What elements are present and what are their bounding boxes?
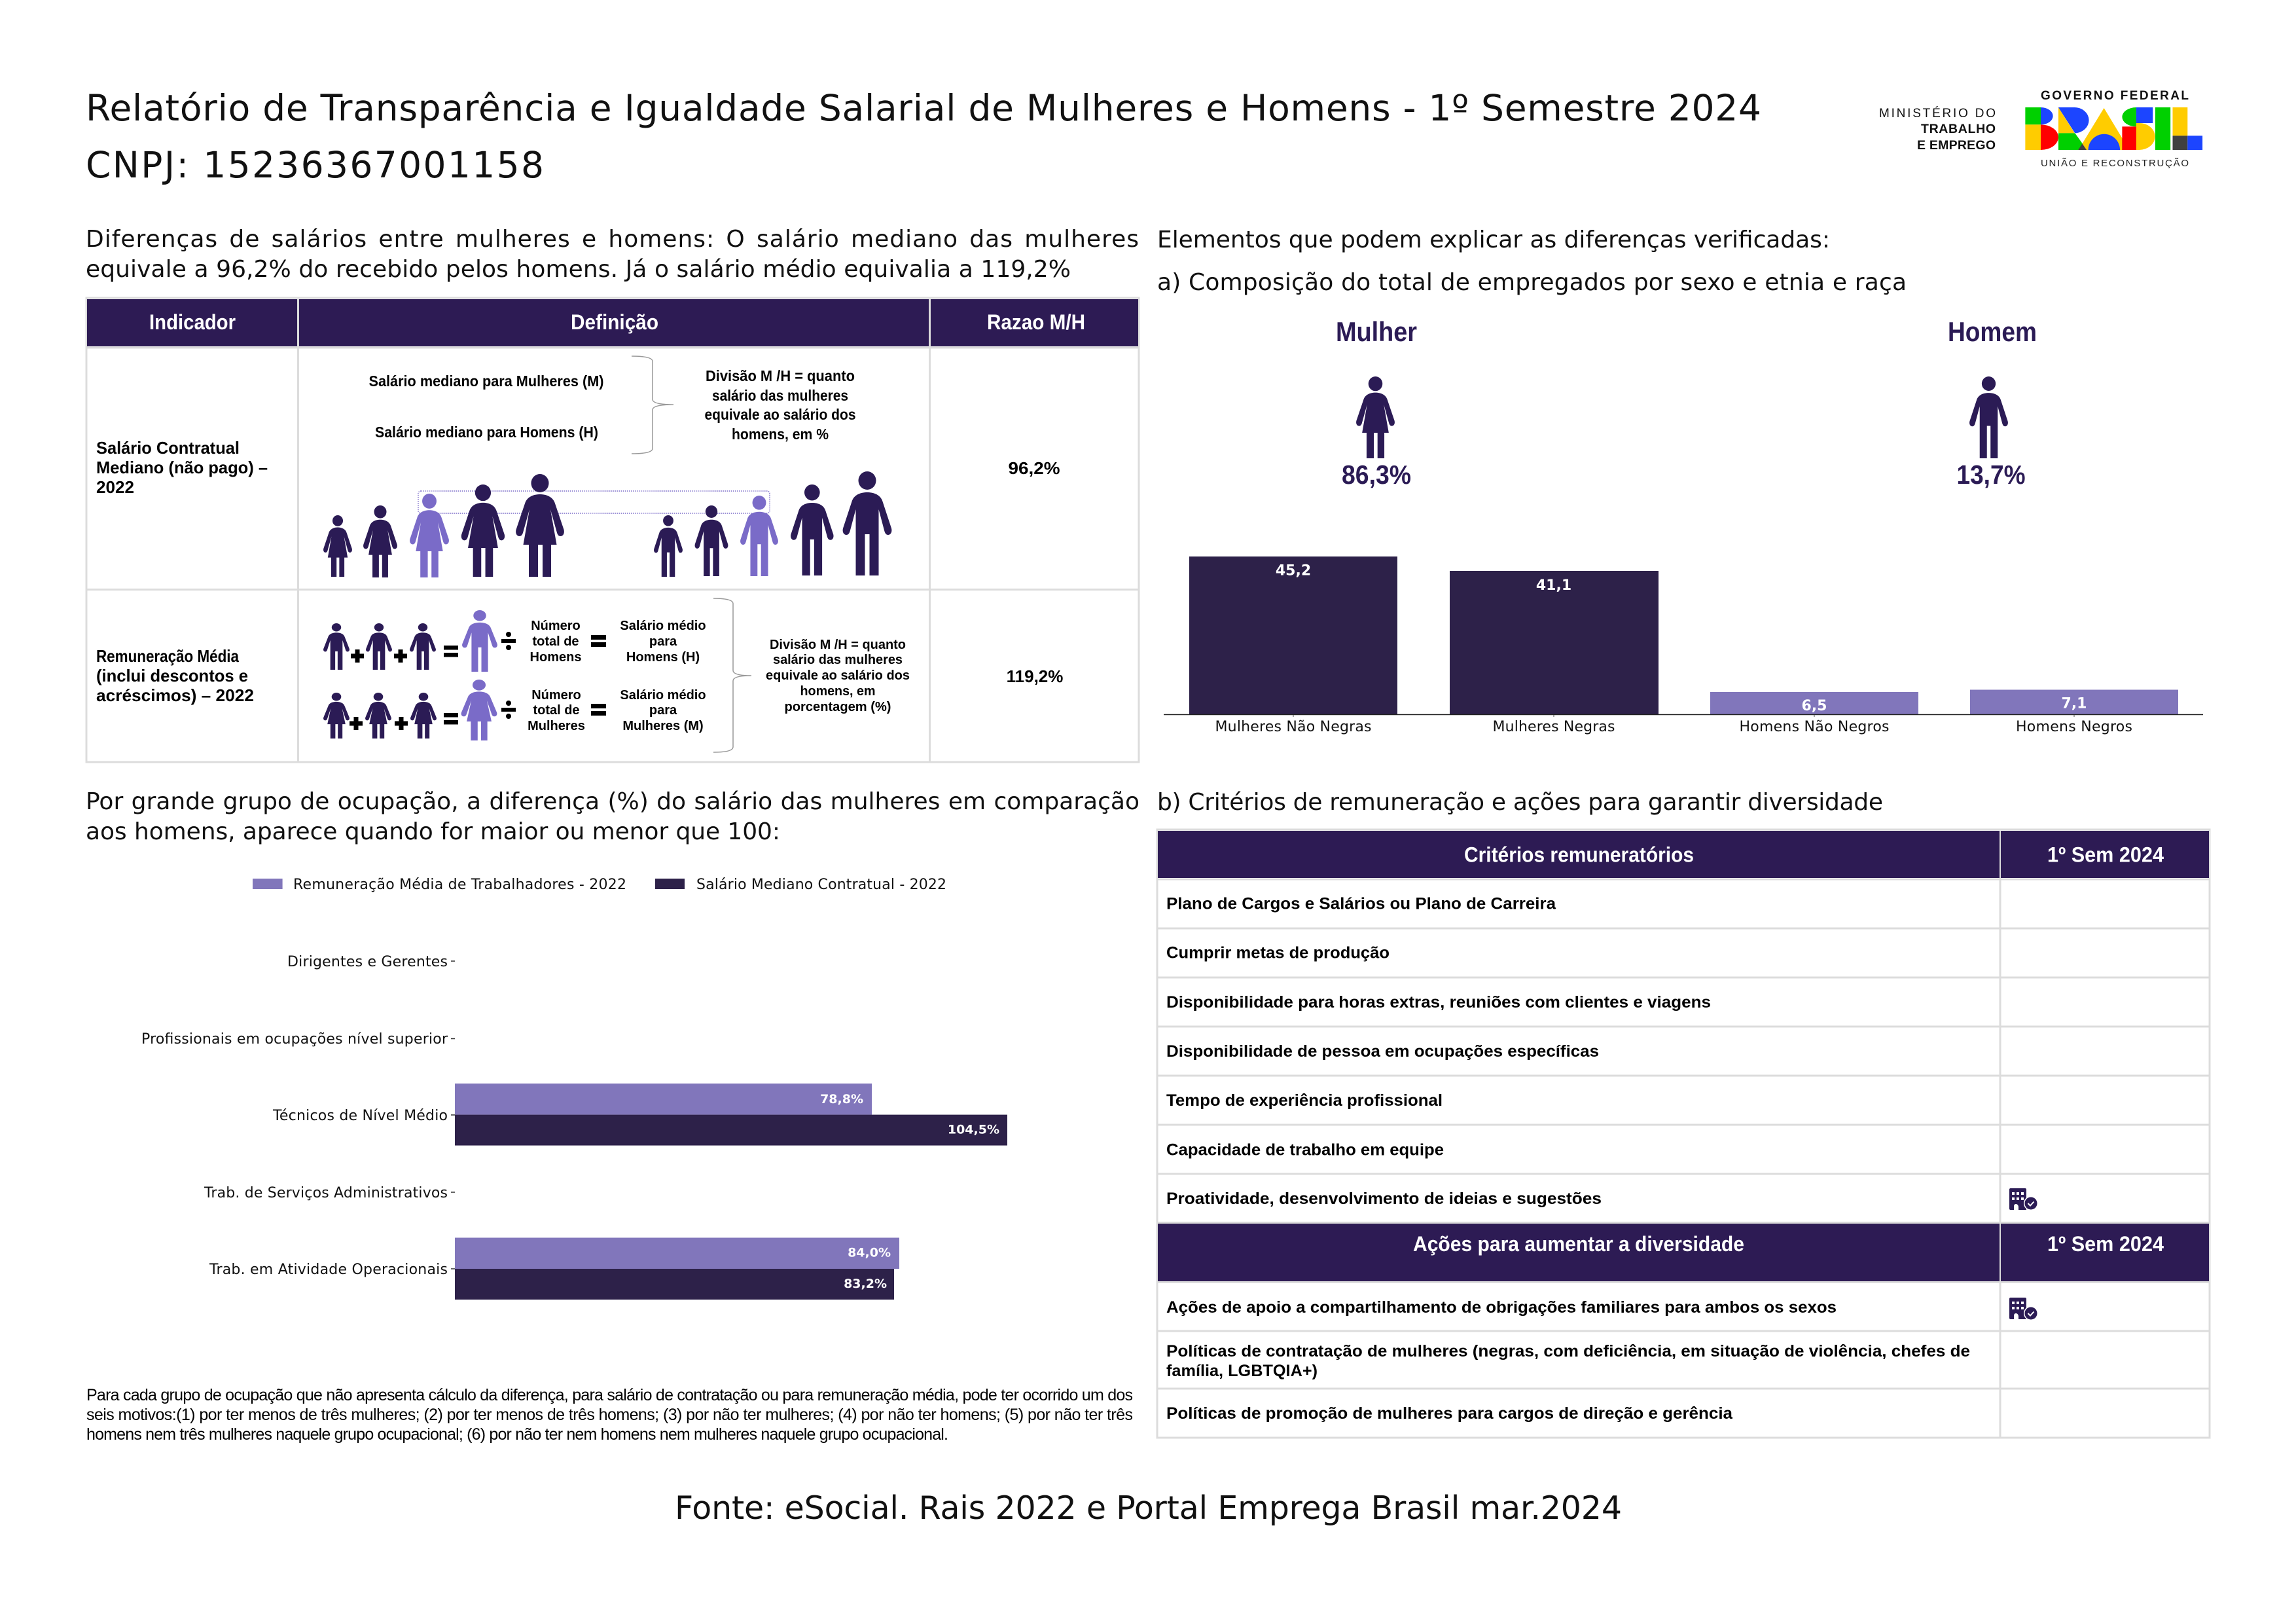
label: homem — [1948, 316, 2037, 490]
bar chart: sex and race: Homens Não Negros — [1740, 719, 1889, 735]
criteria rows — [1166, 894, 1711, 1208]
panel: indicator table — [86, 298, 1139, 762]
definition: divisão mediano: homens, em % — [732, 426, 829, 443]
definition: divisão mediano: equivale ao salário dos — [704, 406, 856, 423]
formula: men average: Homens — [530, 650, 581, 665]
formula: men average: total de — [532, 634, 579, 649]
label: homem: Homem — [1948, 316, 2037, 347]
definition: divisão média — [766, 638, 910, 714]
brace: média — [713, 598, 751, 752]
row label: salário contratual: Mediano (não pago) – — [96, 458, 268, 477]
criteria rows: Disponibilidade para horas extras, reuniões com clientes e viagens — [1166, 993, 1711, 1012]
footnote: Para cada grupo de ocupação que não apresenta cálculo da diferença, para salário de contratação ou para remuneração média, pode ter ocorrido um dos — [86, 1386, 1133, 1404]
formula: women average: total de — [533, 703, 580, 718]
axis labels: Trab. em Atividade Operacionais — [209, 1262, 448, 1278]
formula: women average: Mulheres (M) — [622, 719, 704, 733]
formula: men average — [323, 610, 706, 672]
definition: divisão mediano — [704, 367, 856, 443]
logo: ministério: E EMPREGO — [1917, 138, 1996, 153]
axis labels — [141, 954, 448, 1278]
bar chart: sex and race: Mulheres Não Negras — [1215, 719, 1372, 735]
row label: remuneração média: Remuneração Média — [96, 646, 239, 666]
value: razão mediano: 96,2% — [1008, 458, 1060, 478]
formula: women average: para — [649, 703, 677, 718]
row label: remuneração média — [96, 646, 254, 705]
action rows: Ações de apoio a compartilhamento de obrigações familiares para ambos os sexos — [1166, 1298, 1837, 1317]
label: mulher — [1336, 316, 1417, 490]
action rows: Políticas de promoção de mulheres para cargos de direção e gerência — [1166, 1404, 1733, 1423]
footnote — [86, 1386, 1133, 1444]
bars: operacionais: 83,2% — [844, 1277, 887, 1291]
logo: ministério: MINISTÉRIO DO — [1879, 107, 1996, 120]
footnote: seis motivos:(1) por ter menos de três mulheres; (2) por ter menos de três homens; (3) por não ter mulheres; (4) por não ter homens; (5) por não ter três — [86, 1406, 1133, 1424]
definition: salário mediano labels — [369, 373, 603, 441]
title: CNPJ: 15236367001158 — [86, 144, 544, 186]
bar chart: sex and race: Homens Negros — [2016, 719, 2132, 735]
logo: governo federal brasil: GOVERNO FEDERAL — [2041, 89, 2189, 103]
bar chart: sex and race: 7,1 — [2062, 695, 2087, 712]
footnote: homens nem três mulheres naquele grupo ocupacional; (6) por não ter nem homens nem mulheres naquele grupo ocupacional. — [86, 1425, 948, 1444]
bars: técnicos: 104,5% — [948, 1122, 999, 1137]
chart: occupation bar chart — [141, 877, 1007, 1300]
bars: operacionais — [455, 1237, 899, 1300]
action rows: Políticas de contratação de mulheres (negras, com deficiência, em situação de violência, chefes de — [1166, 1342, 1970, 1360]
header: ações diversidade: Ações para aumentar a diversidade — [1413, 1232, 1744, 1256]
label: mulher: Mulher — [1336, 316, 1417, 347]
bar chart: sex and race: 45,2 — [1276, 563, 1311, 579]
bars: operacionais: 84,0% — [848, 1245, 891, 1260]
formula: women average: Número — [531, 688, 581, 702]
title: Relatório de Transparência e Igualdade Salarial de Mulheres e Homens - 1º Semestre 2024 — [86, 87, 1761, 129]
definition: divisão mediano: Divisão M /H = quanto — [706, 367, 855, 384]
row label: remuneração média: acréscimos) – 2022 — [96, 685, 254, 705]
table header labels: Razao M/H — [987, 310, 1085, 334]
definition: salário mediano labels: Salário mediano para Homens (H) — [375, 424, 598, 441]
definition: salário mediano labels: Salário mediano para Mulheres (M) — [369, 373, 603, 390]
definition: divisão média: homens, em — [800, 684, 876, 699]
bars: técnicos — [455, 1084, 1007, 1146]
formula: men average: Homens (H) — [626, 650, 700, 665]
criteria rows: Plano de Cargos e Salários ou Plano de Carreira — [1166, 894, 1556, 913]
definition: divisão média: porcentagem (%) — [784, 700, 891, 714]
formula: men average: Salário médio — [620, 619, 706, 633]
text: diferenças line 1: Diferenças de salários entre mulheres e homens: O salário mediano das mulheres — [86, 226, 1139, 253]
panel: criteria table — [1157, 830, 2210, 1438]
formula: men average: Número — [531, 619, 581, 633]
table header labels: Definição — [571, 310, 658, 334]
header: ações diversidade — [1413, 1232, 2164, 1256]
bar chart: sex and race — [1164, 556, 2203, 735]
criteria rows: Proatividade, desenvolvimento de ideias e sugestões — [1166, 1190, 1602, 1208]
axis labels: Trab. de Serviços Administrativos — [204, 1185, 448, 1201]
label: homem: 13,7% — [1957, 460, 2025, 490]
legend: Remuneração Média de Trabalhadores - 2022 — [293, 877, 626, 893]
row label: remuneração média: (inclui descontos e — [96, 666, 248, 685]
header: critérios remuneratórios: 1º Sem 2024 — [2047, 843, 2164, 867]
definition: divisão média: salário das mulheres — [773, 653, 903, 667]
icon row: five men — [654, 471, 891, 577]
logo: ministério — [1879, 107, 1996, 153]
brace: mediano — [632, 356, 673, 454]
icon: company check proatividade — [2009, 1188, 2038, 1211]
text: elementos: Elementos que podem explicar as diferenças verificadas: — [1157, 227, 1830, 253]
definition: divisão média: Divisão M /H = quanto — [770, 638, 906, 652]
bar chart: sex and race: Mulheres Negras — [1492, 719, 1615, 735]
value: razão média: 119,2% — [1007, 666, 1063, 686]
panel: composition — [1164, 316, 2203, 735]
definition: divisão média: equivale ao salário dos — [766, 668, 910, 683]
criteria rows: Tempo de experiência profissional — [1166, 1091, 1443, 1110]
header: critérios remuneratórios — [1464, 843, 2164, 867]
title — [86, 87, 1761, 186]
axis labels: Técnicos de Nível Médio — [272, 1108, 448, 1124]
criteria rows: Cumprir metas de produção — [1166, 944, 1390, 962]
heading: critérios: b) Critérios de remuneração e ações para garantir diversidade — [1157, 789, 1883, 816]
legend: Salário Mediano Contratual - 2022 — [696, 877, 946, 893]
action rows — [1166, 1298, 1970, 1423]
text: por grande grupo line 2: aos homens, aparece quando for maior ou menor que 100: — [86, 818, 780, 845]
axis labels: Profissionais em ocupações nível superior — [141, 1031, 448, 1048]
definition: divisão mediano: salário das mulheres — [712, 387, 848, 404]
bar chart: sex and race: 6,5 — [1802, 698, 1827, 714]
formula: men average: para — [649, 634, 677, 649]
formula: women average: Mulheres — [528, 719, 585, 733]
text: por grande grupo line 1: Por grande grupo de ocupação, a diferença (%) do salário das mulheres em comparação — [86, 788, 1139, 815]
row label: salário contratual: 2022 — [96, 477, 134, 497]
bars: técnicos: 78,8% — [820, 1092, 863, 1106]
header: ações diversidade: 1º Sem 2024 — [2047, 1232, 2164, 1256]
table header labels: Indicador — [149, 310, 236, 334]
criteria rows: Capacidade de trabalho em equipe — [1166, 1140, 1444, 1159]
criteria rows: Disponibilidade de pessoa em ocupações específicas — [1166, 1042, 1599, 1061]
source line: Fonte: eSocial. Rais 2022 e Portal Emprega Brasil mar.2024 — [675, 1489, 1622, 1527]
formula: women average — [323, 680, 706, 740]
formula: women average: Salário médio — [620, 688, 706, 702]
logo: governo federal brasil: UNIÃO E RECONSTRUÇÃO — [2041, 158, 2189, 169]
row label: salário contratual: Salário Contratual — [96, 438, 240, 458]
axis labels: Dirigentes e Gerentes — [287, 954, 448, 970]
icon: company check ações — [2009, 1298, 2038, 1321]
action rows: família, LGBTQIA+) — [1166, 1362, 1318, 1380]
legend — [253, 877, 946, 893]
table header labels — [149, 310, 1085, 334]
highlight: dotted median link — [418, 491, 770, 513]
logo: ministério: TRABALHO — [1921, 122, 1996, 136]
logo: governo federal brasil — [2025, 89, 2202, 169]
text: diferenças line 2: equivale a 96,2% do recebido pelos homens. Já o salário médio equivalia a 119,2% — [86, 256, 1071, 283]
icon row: five women — [323, 474, 564, 577]
label: mulher: 86,3% — [1342, 460, 1411, 490]
text: composição heading: a) Composição do total de empregados por sexo e etnia e raça — [1157, 269, 1907, 296]
row label: salário contratual — [96, 438, 268, 497]
header: critérios remuneratórios: Critérios remuneratórios — [1464, 843, 1694, 867]
bar chart: sex and race: 41,1 — [1536, 577, 1571, 594]
